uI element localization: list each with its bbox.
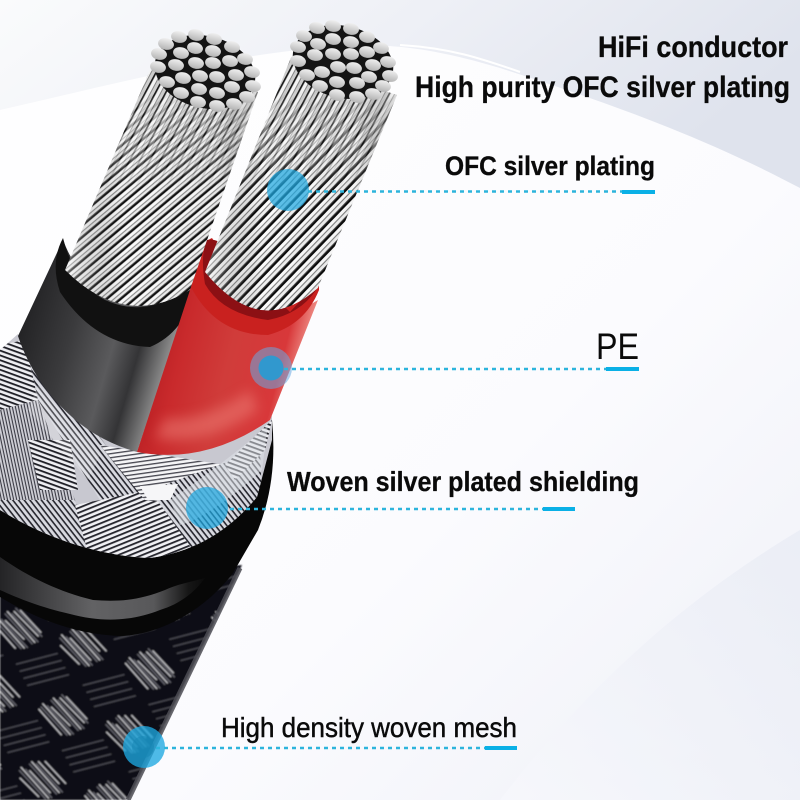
callout: OFC silver plating bbox=[267, 151, 655, 211]
right conductor bbox=[205, 15, 401, 311]
callout: Woven silver plated shielding: Woven silver plated shielding bbox=[287, 466, 639, 497]
callout: Woven silver plated shielding bbox=[186, 466, 639, 529]
collar highlight band bbox=[0, 557, 205, 620]
black sleeve rim bbox=[56, 238, 194, 347]
red sleeve inner shadow bbox=[203, 240, 316, 320]
red sleeve bottom glow bbox=[155, 390, 258, 440]
title bbox=[415, 31, 790, 104]
black sleeve bbox=[18, 240, 192, 452]
callout: OFC silver plating: OFC silver plating bbox=[445, 151, 655, 181]
mesh outer jacket bbox=[0, 565, 242, 800]
callout: High density woven mesh: High density woven mesh bbox=[221, 712, 517, 743]
red sleeve rim bbox=[190, 238, 319, 335]
woven silver shielding bbox=[0, 330, 280, 570]
conductor end strands bbox=[147, 25, 263, 119]
cable illustration bbox=[0, 15, 401, 800]
conductor end strands bbox=[285, 15, 401, 109]
callout: PE bbox=[250, 326, 639, 389]
left conductor bbox=[65, 25, 263, 306]
black collar ring bbox=[0, 420, 273, 636]
callout: High density woven mesh bbox=[123, 712, 517, 768]
callout: PE: PE bbox=[596, 326, 639, 367]
red sleeve bbox=[137, 240, 318, 455]
